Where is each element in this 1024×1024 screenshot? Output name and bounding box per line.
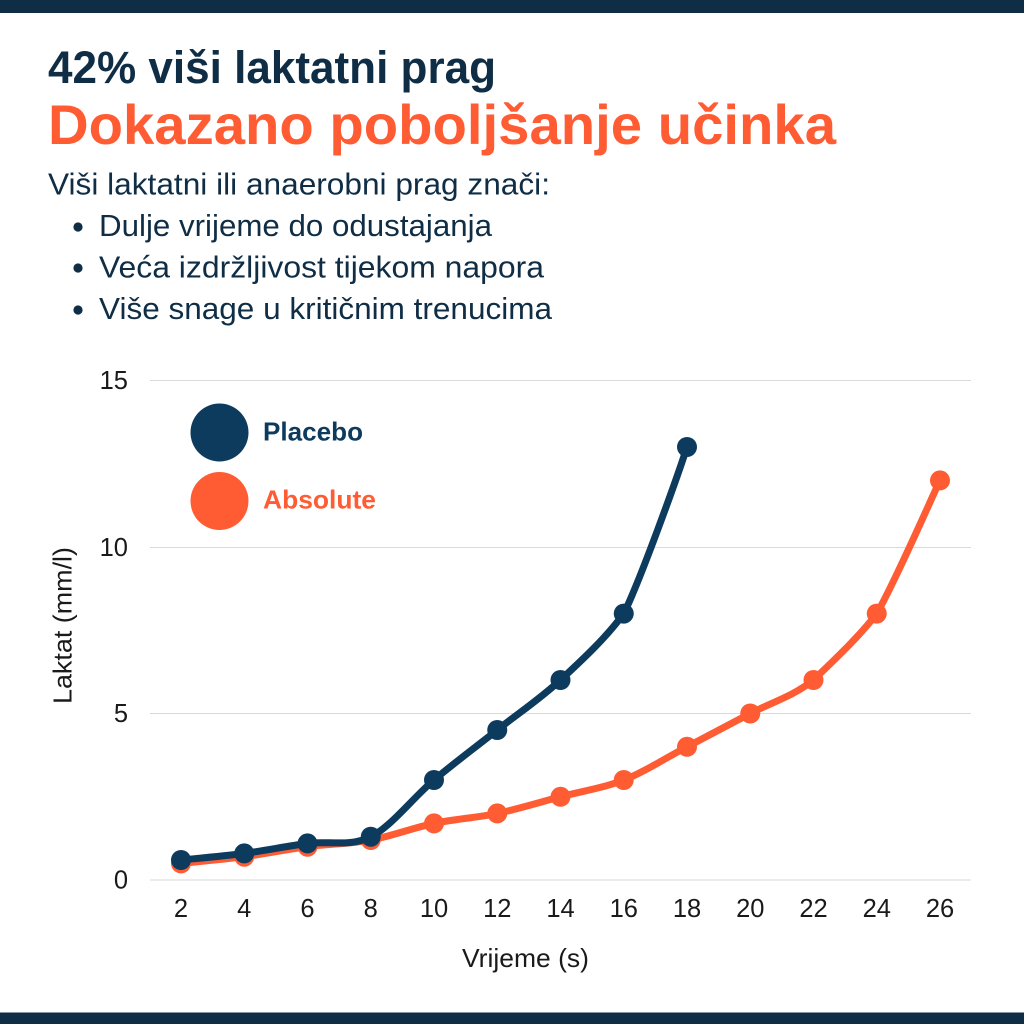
x axis tick labels: 8 — [364, 895, 378, 923]
heading: 42% higher lactate threshold: 42% viši laktatni prag — [48, 42, 496, 93]
x axis tick labels: 12 — [483, 895, 511, 923]
legend: Placebo — [263, 416, 363, 446]
y axis tick labels: 10 — [100, 534, 128, 562]
text block: intro and bullet list: Dulje vrijeme do odustajanja — [99, 209, 492, 243]
series: Placebo — [171, 437, 697, 870]
y axis tick labels — [100, 367, 128, 894]
text block: intro and bullet list: Viši laktatni ili anaerobni prag znači: — [48, 168, 550, 202]
line chart — [48, 367, 971, 973]
x axis tick labels: 16 — [610, 895, 638, 923]
y axis tick labels: 15 — [100, 367, 128, 395]
x axis tick labels: 14 — [546, 895, 575, 923]
y axis tick labels: 5 — [114, 700, 128, 728]
bottom bar — [0, 1012, 1024, 1024]
legend — [190, 404, 376, 530]
x axis tick labels: 18 — [673, 895, 701, 923]
x axis tick labels: 6 — [300, 895, 315, 923]
text block: intro and bullet list — [48, 168, 552, 326]
x axis tick labels — [174, 895, 954, 923]
text block: intro and bullet list: Veća izdržljivost tijekom napora — [99, 250, 544, 284]
x axis tick labels: 20 — [736, 895, 764, 923]
top bar — [0, 0, 1024, 13]
y axis tick labels: 0 — [114, 866, 128, 894]
series: Absolute — [171, 470, 950, 873]
text block: intro and bullet list: Više snage u kritičnim trenucima — [99, 292, 552, 326]
x axis tick labels: 2 — [174, 895, 188, 923]
x axis title: Vrijeme (s) — [462, 943, 589, 973]
legend: Absolute — [263, 484, 376, 514]
x axis tick labels: 26 — [926, 895, 954, 923]
heading: proven performance improvement: Dokazano poboljšanje učinka — [48, 93, 837, 156]
x axis tick labels: 24 — [863, 895, 891, 923]
x axis tick labels: 4 — [237, 895, 251, 923]
x axis tick labels: 10 — [420, 895, 448, 923]
x axis tick labels: 22 — [799, 895, 828, 923]
y axis title: Laktat (mm/l) — [48, 547, 78, 704]
